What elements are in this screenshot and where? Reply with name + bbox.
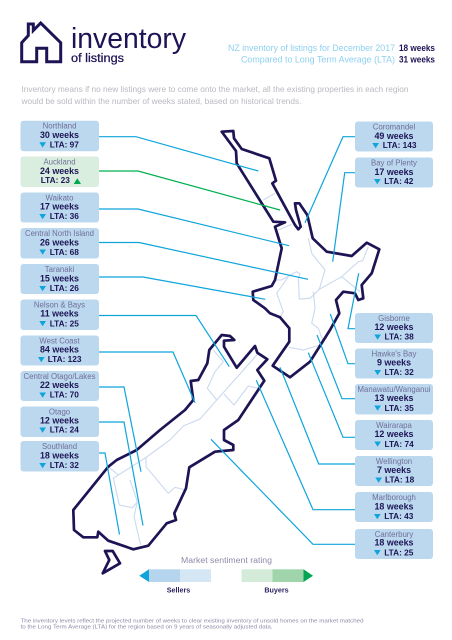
- region: Southland: [20, 441, 99, 472]
- region: Canterbury: 18 weeks: [375, 538, 414, 548]
- region: Central North Island: Central North Island: [25, 229, 94, 238]
- region: Coromandel: Coromandel: [373, 122, 415, 132]
- region: Auckland: [20, 156, 99, 187]
- intro text: would be sold within the number of weeks stated, based on historical trends.: [21, 96, 302, 106]
- region: West Coast: [20, 336, 99, 366]
- region: Hawke's Bay: [355, 348, 433, 378]
- region: Northland: [20, 121, 99, 151]
- region: Bay of Plenty: 17 weeks: [375, 167, 414, 177]
- region: Coromandel: [355, 122, 433, 152]
- region: Marlborough: Marlborough: [372, 493, 416, 502]
- region: Wellington: LTA: 18: [385, 474, 415, 484]
- national inventory summary: NZ inventory of listings for December 2017: [228, 43, 395, 53]
- national inventory summary: [228, 43, 435, 64]
- region: Manawatu/Wanganui: [355, 384, 433, 414]
- region: Central Otago/Lakes: Central Otago/Lakes: [24, 372, 96, 381]
- region: Coromandel: LTA: 143: [383, 140, 417, 150]
- region: Nelson & Bays: LTA: 25: [50, 318, 79, 328]
- region: Wellington: [355, 456, 433, 486]
- region: West Coast: West Coast: [39, 336, 80, 346]
- region: Southland: LTA: 32: [50, 460, 79, 470]
- region: Nelson & Bays: 11 weeks: [40, 309, 79, 319]
- region: Wellington: Wellington: [376, 457, 412, 466]
- region: Coromandel: 49 weeks: [375, 131, 414, 141]
- south island outline: [73, 335, 267, 549]
- region: Gisborne: Gisborne: [378, 314, 410, 323]
- region: Waikato: LTA: 36: [50, 211, 79, 221]
- region: Taranaki: 15 weeks: [40, 274, 79, 284]
- region: Auckland: 24 weeks: [40, 166, 79, 176]
- region: Wellington: 7 weeks: [377, 465, 411, 475]
- region: Nelson & Bays: Nelson & Bays: [34, 300, 85, 310]
- region: Waikato: 17 weeks: [40, 202, 79, 212]
- region: West Coast: 84 weeks: [40, 344, 79, 354]
- national inventory summary: 31 weeks: [399, 54, 435, 64]
- region: Southland: Southland: [42, 442, 77, 451]
- region: Wairarapa: Wairarapa: [376, 421, 412, 430]
- region: Central North Island: LTA: 68: [50, 247, 79, 257]
- region: Gisborne: [355, 313, 433, 343]
- region: Waikato: Waikato: [46, 194, 74, 202]
- region: Otago: LTA: 24: [50, 424, 79, 434]
- national inventory summary: 18 weeks: [399, 43, 435, 53]
- intro text: [21, 84, 409, 106]
- region: Hawke's Bay: LTA: 32: [384, 367, 414, 377]
- regional boundaries: [108, 193, 368, 545]
- leader lines: [99, 137, 359, 544]
- region: Otago: 12 weeks: [40, 415, 79, 425]
- map: New Zealand: [73, 131, 379, 573]
- region: West Coast: LTA: 123: [48, 354, 82, 364]
- region: Wairarapa: [355, 420, 433, 450]
- footnote: to the Long Term Average (LTA) for the region based on 9 years of seasonally adjusted data.: [20, 624, 273, 630]
- national inventory summary: Compared to Long Term Average (LTA): [241, 54, 395, 64]
- region: Central Otago/Lakes: [20, 371, 99, 401]
- region: Taranaki: Taranaki: [45, 265, 74, 274]
- legend: market sentiment rating: [139, 556, 313, 594]
- region: Manawatu/Wanganui: Manawatu/Wanganui: [358, 385, 431, 394]
- region: Bay of Plenty: LTA: 42: [384, 176, 414, 186]
- intro text: Inventory means if no new listings were to come onto the market, all the existing properties in each region: [22, 84, 409, 94]
- legend: market sentiment rating: Sellers: [167, 585, 190, 594]
- region: Bay of Plenty: Bay of Plenty: [371, 158, 417, 168]
- region: Nelson & Bays: [20, 300, 99, 330]
- region: Marlborough: [355, 492, 433, 522]
- footnote: [20, 618, 364, 630]
- region: Taranaki: [20, 264, 99, 294]
- region: Auckland: Auckland: [43, 158, 76, 166]
- region: Waikato: [20, 192, 99, 222]
- region: Manawatu/Wanganui: LTA: 35: [384, 403, 414, 413]
- region: Gisborne: 12 weeks: [375, 322, 414, 332]
- region: Bay of Plenty: [355, 158, 433, 188]
- region: Canterbury: Canterbury: [375, 530, 413, 539]
- region: Canterbury: [355, 529, 433, 559]
- legend: market sentiment rating: Market sentiment rating: [181, 556, 272, 565]
- region: Northland: 30 weeks: [40, 130, 79, 140]
- region: Marlborough: LTA: 43: [384, 511, 414, 521]
- region: Hawke's Bay: Hawke's Bay: [372, 350, 417, 358]
- region: Marlborough: 18 weeks: [375, 501, 414, 511]
- region: Otago: Otago: [49, 408, 71, 416]
- region: Hawke's Bay: 9 weeks: [377, 358, 411, 368]
- region: Southland: 18 weeks: [40, 450, 79, 460]
- stewart island outline: [103, 551, 120, 573]
- footnote: The inventory levels reflect the projected number of weeks to clear existing inventory of unsold homes on the market matched: [20, 618, 364, 624]
- region: Central Otago/Lakes: LTA: 70: [50, 390, 79, 400]
- region: Auckland: LTA: 23: [41, 175, 70, 185]
- title: inventory: [71, 23, 187, 55]
- region: Canterbury: LTA: 25: [384, 548, 414, 558]
- region: Central Otago/Lakes: 22 weeks: [40, 380, 79, 390]
- logo: house icon: [22, 23, 61, 62]
- region: Gisborne: LTA: 38: [384, 332, 414, 342]
- region: Central North Island: 26 weeks: [40, 238, 79, 248]
- legend: market sentiment rating: Buyers: [264, 585, 289, 594]
- region: Manawatu/Wanganui: 13 weeks: [375, 393, 414, 403]
- region: Wairarapa: 12 weeks: [375, 429, 414, 439]
- region: Wairarapa: LTA: 74: [384, 439, 414, 449]
- region: Central North Island: [20, 228, 99, 258]
- north island outline: [222, 131, 379, 377]
- region: Taranaki: LTA: 26: [50, 283, 79, 293]
- region: Otago: [20, 406, 99, 437]
- title: of listings: [71, 53, 124, 65]
- region: Northland: LTA: 97: [50, 140, 79, 150]
- region: Northland: Northland: [43, 122, 76, 131]
